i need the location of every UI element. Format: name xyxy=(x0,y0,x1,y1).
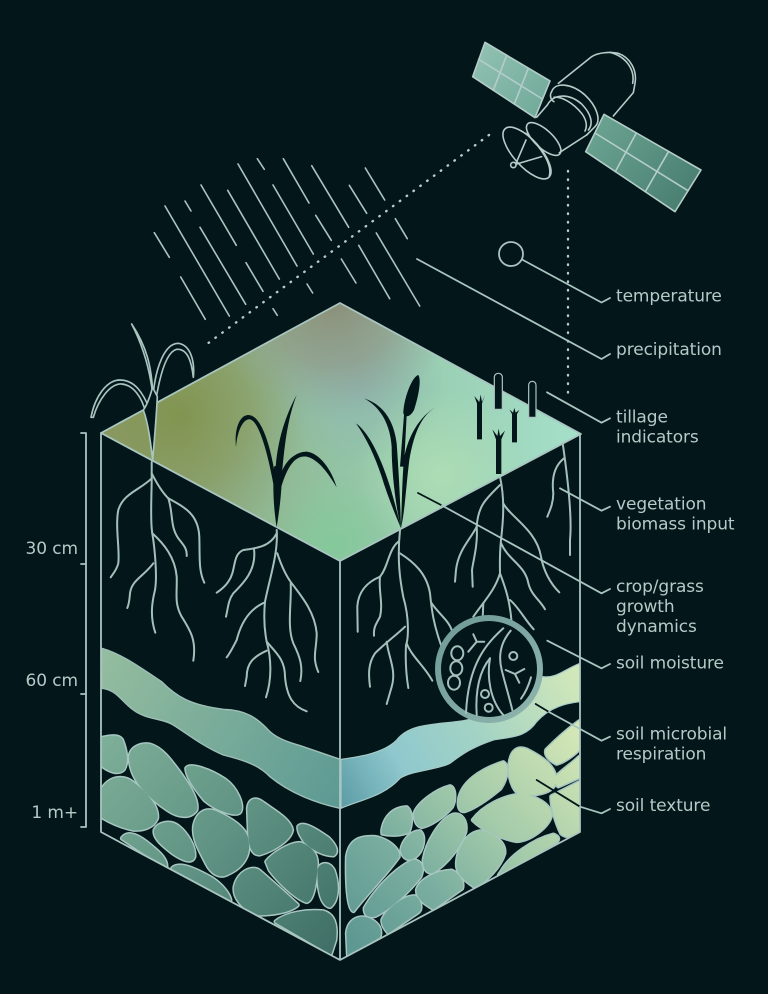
dotted signal line: satellite downward xyxy=(567,171,569,394)
stub 1 xyxy=(474,395,485,439)
plant 3 roots xyxy=(357,530,452,704)
label: tillage indicators: indicators xyxy=(616,428,699,448)
label: temperature: temperature xyxy=(616,286,722,306)
label: soil microbial respiration: respiration xyxy=(616,744,706,764)
satellite xyxy=(473,42,701,212)
plant 1 roots xyxy=(111,462,204,661)
tall post 1 xyxy=(494,373,502,409)
soil block edges xyxy=(101,433,580,960)
dotted signal line: satellite to field xyxy=(203,135,489,347)
depth label: 30 cm: 30 cm xyxy=(26,539,78,559)
label: crop/grass growth dynamics: growth xyxy=(616,597,675,617)
satellite left solar panel xyxy=(473,42,550,118)
label: soil texture: soil texture xyxy=(616,796,710,816)
label: vegetation biomass input: biomass input xyxy=(616,514,735,534)
plant 2 roots xyxy=(217,530,318,711)
leader: soil moisture xyxy=(547,641,610,668)
stub 2 xyxy=(509,408,519,442)
plant 3: dark cattail silhouette xyxy=(356,375,435,528)
label: precipitation: precipitation xyxy=(616,340,722,360)
leader: soil microbial respiration xyxy=(536,704,610,741)
label: soil moisture: soil moisture xyxy=(616,654,724,674)
top surface of soil block xyxy=(101,303,581,561)
soil texture rocks: left face xyxy=(102,737,337,953)
tall post 2 xyxy=(529,381,536,417)
label: crop/grass growth dynamics: crop/grass xyxy=(616,577,704,597)
plant 1: outlined grass above surface xyxy=(91,324,194,460)
leader: soil texture xyxy=(537,780,610,813)
plant 2: dark grass silhouette xyxy=(236,395,337,527)
label: vegetation biomass input: vegetation xyxy=(616,494,706,514)
leader: vegetation biomass input xyxy=(560,488,610,511)
leader: precipitation xyxy=(417,259,610,359)
leader: tillage indicators xyxy=(547,392,610,423)
label: soil microbial respiration: soil microbial xyxy=(616,724,727,744)
microbe lens: magnified soil view xyxy=(438,618,540,720)
depth label: 1 m+: 1 m+ xyxy=(31,803,78,823)
plant 4 roots xyxy=(455,477,559,629)
satellite dish antenna xyxy=(495,120,559,186)
tillage indicators: stubble and posts xyxy=(474,373,536,474)
rain: precipitation strokes xyxy=(154,159,420,319)
satellite right solar panel xyxy=(586,114,701,212)
depth label: 60 cm: 60 cm xyxy=(26,671,78,691)
soil moisture band: left face xyxy=(102,648,340,808)
soil texture rocks: right face xyxy=(347,722,579,955)
temperature sensor icon and leader xyxy=(499,242,610,302)
plant 5 roots xyxy=(547,443,571,555)
microbes and soil pores xyxy=(448,628,531,715)
label: tillage indicators: tillage xyxy=(616,408,668,428)
soil moisture band: right face xyxy=(341,663,580,808)
label: crop/grass growth dynamics: dynamics xyxy=(616,617,697,637)
stub 3 xyxy=(492,429,505,474)
leader: crop/grass growth dynamics xyxy=(418,493,610,593)
depth scale bracket xyxy=(81,433,86,827)
satellite body xyxy=(521,52,635,161)
